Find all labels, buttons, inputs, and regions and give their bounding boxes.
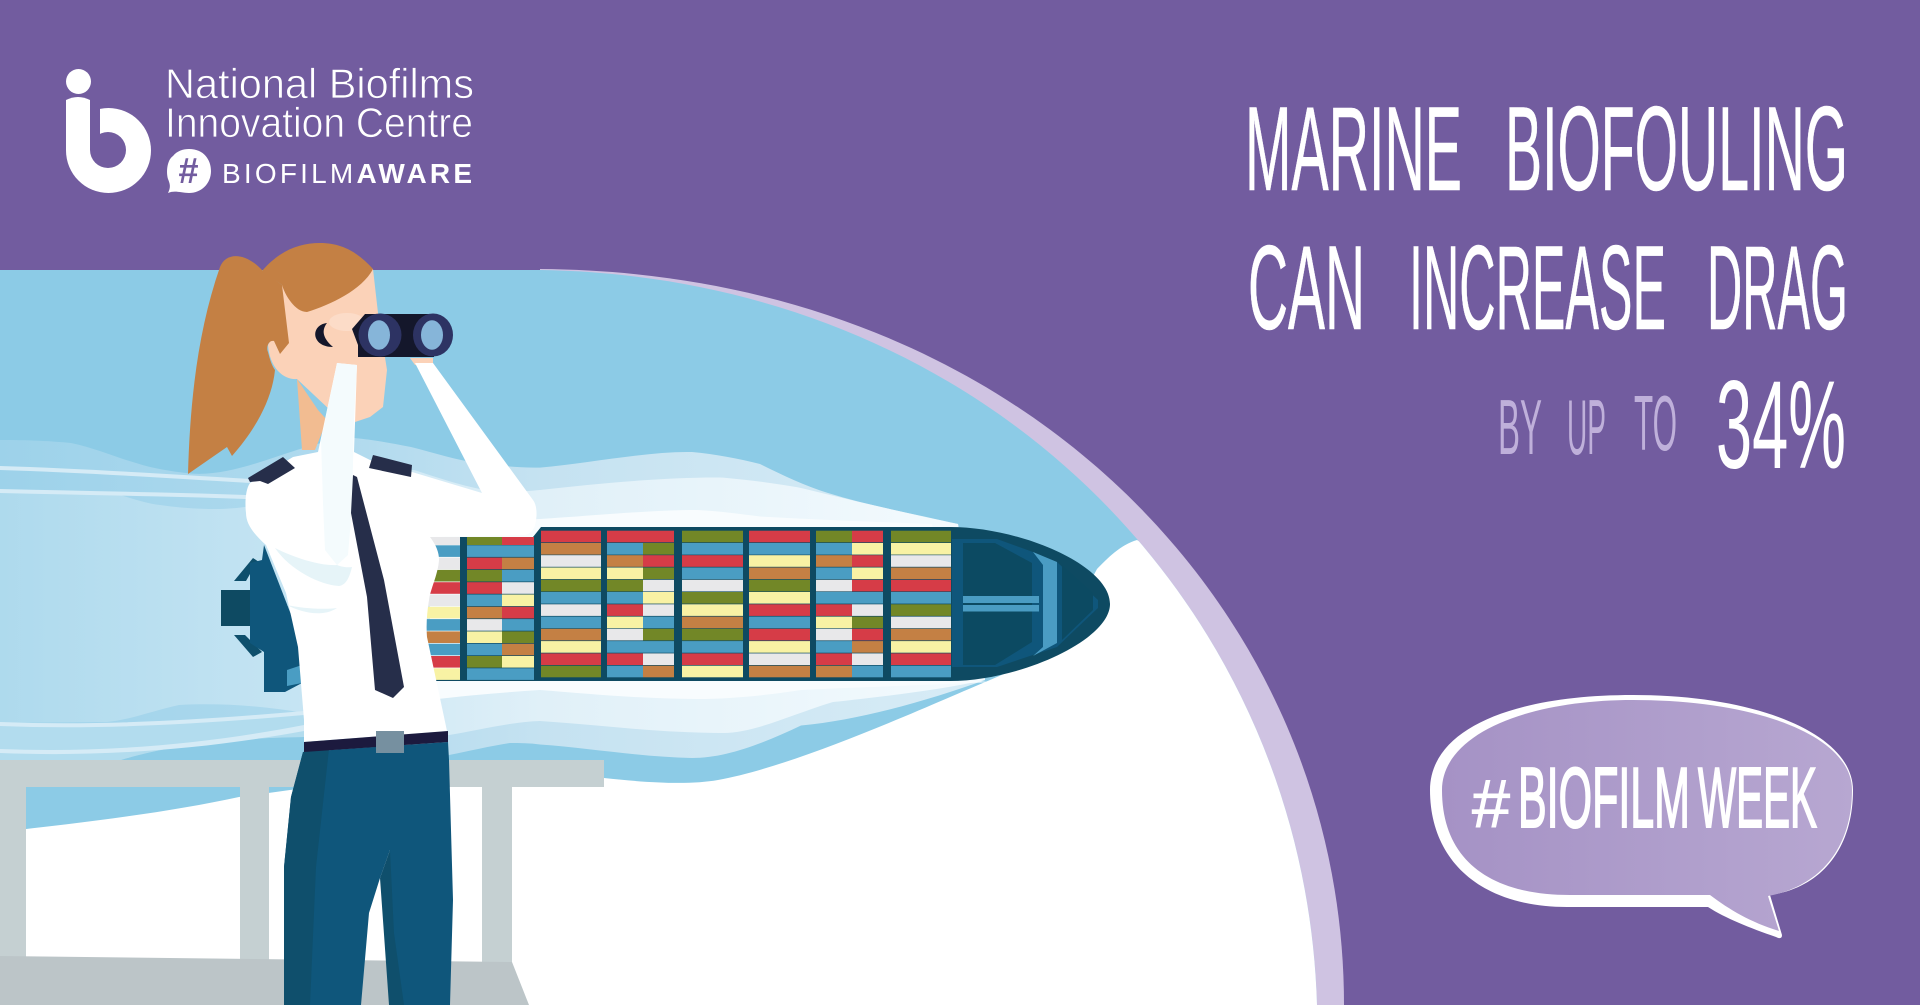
shirt folds [275,548,352,613]
ship stern and rudder [221,545,302,692]
tie [351,475,404,698]
trouser shading [284,749,404,1005]
containers bay 3 [607,531,674,677]
neck [297,379,327,450]
ponytail [188,256,289,474]
headline line 2: CAN [1248,221,1365,355]
white sea foreground [0,540,1400,1005]
wake middle layer [0,470,985,736]
hashtag bubble icon: # [178,150,199,191]
shirt [245,363,537,742]
hashtag bubble icon [167,149,211,193]
containers bay 4 [682,531,743,677]
person [188,243,537,1005]
bridge deck [952,539,1098,667]
wake lower left band [0,721,296,760]
bow dark panel [1062,565,1093,640]
container ship [425,527,1110,681]
bridge dark panel [963,543,1032,665]
lilac arc [540,269,1344,1005]
headline line 2 [1248,221,1848,355]
headline line 1: MARINE [1245,82,1462,216]
containers bay 5 [749,531,810,677]
railing [0,760,604,964]
sea scene [0,270,1400,1005]
eye [315,323,333,347]
logo name: Innovation Centre [165,99,473,146]
containers bay 0 [425,537,460,680]
logo name [165,60,474,146]
binoculars [352,314,453,365]
by up to: BY [1498,383,1542,471]
hull [435,527,1110,681]
headline: TO [1634,379,1677,467]
containers bay 1 [467,537,534,680]
fringe hair [262,243,373,312]
eye highlight [329,313,365,331]
white streaks [0,466,304,754]
sleeve [321,363,357,565]
logo name: National Biofilms [165,60,474,107]
speech bubble [1430,695,1853,938]
belt buckle [376,731,404,753]
wake outer layer [0,438,985,760]
logo [66,60,474,193]
bridge light strip [1033,552,1057,656]
belt [304,731,448,752]
bridge windows [963,596,1039,612]
by up to [1498,379,1677,471]
epaulettes [248,455,412,484]
wake inner layer [430,510,990,700]
logo hashtag: BIOFILMAWARE [222,158,472,189]
headline [1245,82,1848,495]
trousers [284,742,453,1005]
bubble hashtag text: # [1472,766,1510,842]
bubble outline [1430,695,1853,938]
bubble hashtag text: BIOFILM [1518,751,1690,846]
logo mark [66,69,151,193]
containers bay 7 [891,531,951,677]
containers bay 2 [541,531,601,677]
by up to: UP [1567,383,1606,471]
deck [0,956,529,1005]
bubble fill [1442,700,1852,931]
containers bay 6 [816,531,883,677]
sky blue water [0,270,1400,1005]
face [268,269,387,422]
